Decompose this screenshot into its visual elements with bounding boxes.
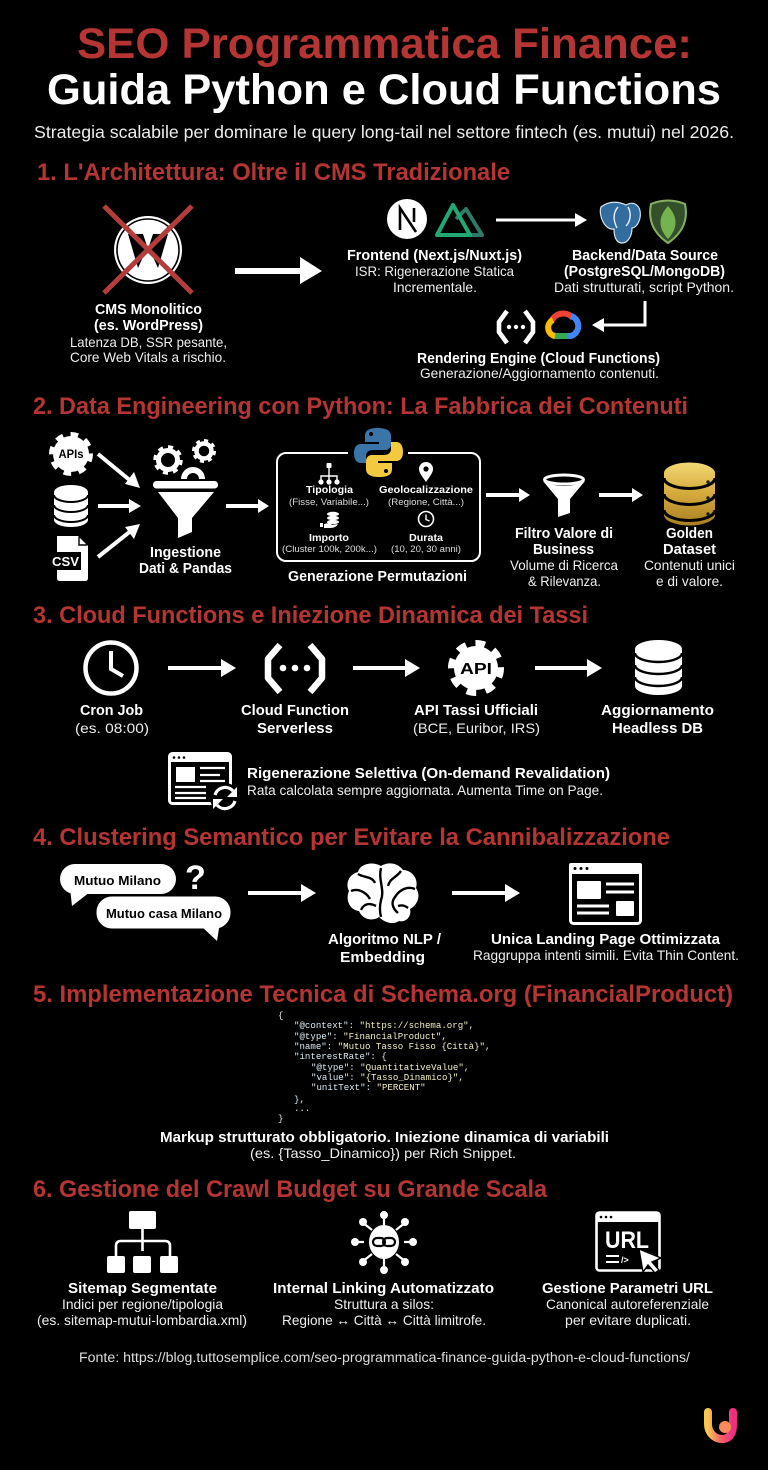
text: sitemap segmentate: Sitemap Segmentate <box>68 1281 217 1297</box>
item: durata: (10, 20, 30 anni) <box>391 544 461 555</box>
item: importo: (Cluster 100k, 200k...) <box>282 544 377 555</box>
text: sitemap segmentate: (es. sitemap-mutui-lombardia.xml) <box>37 1313 247 1328</box>
panel: section 5 schema.org <box>33 981 733 1161</box>
text: markup note: (es. {Tasso_Dinamico}) per Rich Snippet. <box>250 1146 516 1161</box>
panel: section 3 cloud functions <box>33 602 714 813</box>
text: internal linking: Struttura a silos: <box>334 1297 434 1312</box>
text: gestione parametri <box>542 1281 713 1328</box>
item: durata: Durata <box>409 532 443 544</box>
item: tipologia <box>289 463 369 508</box>
panel: section 6 crawl budget <box>33 1176 713 1328</box>
text: golden dataset: Golden <box>666 526 713 542</box>
code block: JSON-LD: { <box>278 1010 283 1021</box>
item: importo <box>282 512 377 555</box>
icon: business filter funnel <box>543 475 585 517</box>
question mark: ? <box>185 859 206 897</box>
code block: JSON-LD: "@type": "FinancialProduct", <box>294 1031 447 1042</box>
speech bubble: Mutuo Milano <box>60 864 176 906</box>
item: geolocalizzazione: (Regione, Città...) <box>388 497 464 508</box>
icon: Google Cloud <box>548 314 578 336</box>
text: rendering engine: Rendering Engine (Cloud Functions) <box>417 351 660 367</box>
code block: JSON-LD: "name": "Mutuo Tasso Fisso {Città}", <box>294 1041 490 1052</box>
icon: brand logo <box>708 1412 733 1439</box>
text: cloud function: Cloud Function <box>241 703 349 719</box>
icon: APIs gear: APIs <box>58 449 84 461</box>
code block: JSON-LD: "value": "{Tasso_Dinamico}", <box>311 1072 464 1083</box>
arrow: backend to rendering engine <box>592 301 645 332</box>
text: filtro valore: Business <box>533 542 594 558</box>
text: gestione parametri: Canonical autoreferenziale <box>546 1297 709 1312</box>
text: filtro valore: Filtro Valore di <box>515 526 613 542</box>
item: geolocalizzazione: Geolocalizzazione <box>379 484 473 496</box>
panel: permutations box <box>277 428 480 561</box>
item: tipologia: Tipologia <box>306 484 353 496</box>
icon: cloud function brackets <box>499 311 533 343</box>
text: aggiornamento: Headless DB <box>612 721 703 737</box>
text: algoritmo NLP <box>328 932 441 966</box>
icon: serverless brackets <box>268 645 322 692</box>
item: geolocalizzazione <box>379 462 473 508</box>
heading 6: 6. Gestione del Crawl Budget su Grande Scala <box>33 1176 548 1203</box>
icon: brain <box>347 863 418 923</box>
text: backend: Dati strutturati, script Python. <box>554 280 734 295</box>
heading 5: 5. Implementazione Tecnica di Schema.org (FinancialProduct) <box>33 981 733 1008</box>
icon: URL browser window <box>596 1212 661 1273</box>
text: rigenerazione selettiva: Rigenerazione Selettiva (On-demand Revalidation) <box>247 766 610 782</box>
text: golden dataset: e di valore. <box>656 574 723 589</box>
icon: headless database <box>635 640 682 695</box>
title: Guida Python e Cloud Functions <box>47 66 721 114</box>
text: frontend: Frontend (Next.js/Nuxt.js) <box>347 248 522 264</box>
text: backend <box>554 248 734 295</box>
text: golden dataset: Contenuti unici <box>644 558 735 573</box>
arrow: API to database <box>535 659 602 677</box>
icon: CSV file: CSV <box>52 554 79 569</box>
text: cloud function: Serverless <box>257 721 333 737</box>
code block: JSON-LD: } <box>278 1113 283 1124</box>
code block: JSON-LD: "@type": "QuantitativeValue", <box>311 1062 469 1073</box>
text: filtro valore <box>510 526 618 589</box>
text: unica landing page: Unica Landing Page Ottimizzata <box>491 932 721 948</box>
text: rendering engine <box>417 351 660 381</box>
text: golden dataset: Dataset <box>663 542 716 558</box>
icon: sitemap tree <box>107 1211 178 1273</box>
heading 1: 1. L'Architettura: Oltre il CMS Tradizionale <box>37 159 510 186</box>
icon: URL browser window: URL <box>605 1227 649 1254</box>
text: unica landing page: Raggruppa intenti simili. Evita Thin Content. <box>473 948 739 963</box>
arrow: permutations to filter <box>486 488 530 502</box>
source line: Fonte: https://blog.tuttosemplice.com/seo-programmatica-finance-guida-python-e-cloud-functions/ <box>79 1350 690 1365</box>
icon: page revalidation <box>169 753 240 813</box>
icon: APIs gear <box>52 435 90 473</box>
arrow: frontend to backend <box>496 213 587 227</box>
text: internal linking: Regione ↔ Città ↔ Città limitrofe. <box>282 1313 486 1328</box>
text: internal linking: Internal Linking Automatizzato <box>273 1281 494 1297</box>
text: gestione parametri: Gestione Parametri URL <box>542 1281 713 1297</box>
text: aggiornamento <box>601 703 714 737</box>
text: algoritmo NLP: Algoritmo NLP / <box>328 932 441 948</box>
icon: cron clock <box>86 642 136 694</box>
text: markup note: Markup strutturato obbligatorio. Iniezione dinamica di variabili <box>160 1130 609 1146</box>
text: frontend: Incrementale. <box>393 280 477 295</box>
text: ingestione: Ingestione <box>150 545 221 561</box>
icon: internal linking hub <box>351 1211 417 1274</box>
code block: JSON-LD: ... <box>294 1103 310 1114</box>
arrow: funnel to permutations <box>226 499 269 513</box>
item: durata <box>391 512 461 555</box>
icon: CSV file <box>50 536 88 581</box>
icon: PostgreSQL <box>600 202 640 243</box>
text: API tassi: API Tassi Ufficiali <box>414 703 538 719</box>
code block: JSON-LD: }, <box>294 1094 305 1105</box>
text: internal linking <box>273 1281 494 1328</box>
icon: crossed out WordPress <box>104 206 192 293</box>
panel: section 2 data engineering <box>33 393 735 589</box>
text: rendering engine: Generazione/Aggiornamento contenuti. <box>420 366 659 381</box>
icon: Python logo <box>354 428 403 477</box>
text: ingestione <box>139 545 232 577</box>
arrow: queries to NLP <box>248 884 316 902</box>
icon: API gear: API <box>460 661 492 678</box>
text: gestione parametri: per evitare duplicati. <box>565 1313 691 1328</box>
text: cloud function <box>241 703 349 737</box>
speech bubble: Mutuo casa Milano <box>96 896 231 941</box>
icon: API gear <box>452 644 500 692</box>
text: frontend <box>347 248 522 295</box>
text: golden dataset <box>644 526 735 589</box>
text: cron job: Cron Job <box>80 703 143 719</box>
heading 3: 3. Cloud Functions e Iniezione Dinamica dei Tassi <box>33 602 588 629</box>
code block: JSON-LD: "unitText": "PERCENT" <box>311 1082 426 1093</box>
text: rigenerazione selettiva <box>247 766 610 798</box>
text: CMS monolitico: (es. WordPress) <box>94 318 203 334</box>
text: unica landing page <box>473 932 739 963</box>
arrow: function to API <box>353 659 420 677</box>
item: tipologia: (Fisse, Variabile...) <box>289 497 369 508</box>
arrow: to modern stack <box>235 257 322 284</box>
text: API tassi <box>413 703 540 736</box>
subtitle: Strategia scalabile per dominare le query long-tail nel settore fintech (es. mutui) nel 2026. <box>34 122 734 142</box>
icon: Nuxt <box>437 205 482 235</box>
text: CMS monolitico: Latenza DB, SSR pesante, <box>70 335 227 350</box>
speech bubble: Mutuo casa Milano: Mutuo casa Milano <box>106 906 222 921</box>
heading 4: 4. Clustering Semantico per Evitare la Cannibalizzazione <box>33 824 670 851</box>
text: CMS monolitico <box>70 302 227 365</box>
icon: landing page <box>569 863 642 924</box>
text: cron job: (es. 08:00) <box>75 721 149 736</box>
text: backend: (PostgreSQL/MongoDB) <box>564 264 725 280</box>
title: SEO Programmatica Finance: <box>77 20 692 68</box>
item: importo: Importo <box>309 532 349 544</box>
speech bubble: Mutuo Milano: Mutuo Milano <box>74 873 161 888</box>
icon: MongoDB <box>650 200 686 243</box>
text: rigenerazione selettiva: Rata calcolata sempre aggiornata. Aumenta Time on Page. <box>247 783 603 798</box>
text: frontend: ISR: Rigenerazione Statica <box>355 264 514 279</box>
text: backend: Backend/Data Source <box>572 248 718 264</box>
text: markup note <box>160 1130 609 1161</box>
icon: golden dataset <box>664 462 715 526</box>
arrow: cron to function <box>168 659 236 677</box>
text: generazione permutazioni: Generazione Permutazioni <box>288 569 467 585</box>
panel: section 1 architecture <box>37 159 734 381</box>
text: filtro valore: & Rilevanza. <box>528 574 601 589</box>
code block: JSON-LD: "interestRate": { <box>294 1051 387 1062</box>
text: API tassi: (BCE, Euribor, IRS) <box>413 721 540 736</box>
icon: URL browser window: /> <box>621 1255 629 1265</box>
code block: JSON-LD: "@context": "https://schema.org", <box>294 1020 474 1031</box>
icon: database <box>54 485 88 527</box>
icon: gears and ingestion funnel <box>153 440 218 538</box>
text: CMS monolitico: Core Web Vitals a rischio. <box>70 350 226 365</box>
icon: Next.js <box>387 199 427 239</box>
panel: section 4 clustering <box>33 824 739 966</box>
text: filtro valore: Volume di Ricerca <box>510 558 618 573</box>
arrows: sources to funnel <box>98 454 141 557</box>
code block: JSON-LD <box>278 1010 490 1124</box>
text: sitemap segmentate: Indici per regione/tipologia <box>62 1297 223 1312</box>
text: CMS monolitico: CMS Monolitico <box>95 302 202 318</box>
heading 2: 2. Data Engineering con Python: La Fabbrica dei Contenuti <box>33 393 688 420</box>
text: algoritmo NLP: Embedding <box>340 950 425 966</box>
text: ingestione: Dati & Pandas <box>139 561 232 577</box>
text: aggiornamento: Aggiornamento <box>601 703 714 719</box>
text: cron job <box>75 703 149 736</box>
title <box>47 20 721 114</box>
text: sitemap segmentate <box>37 1281 247 1328</box>
arrow: filter to dataset <box>599 488 643 502</box>
arrow: NLP to landing page <box>452 884 520 902</box>
